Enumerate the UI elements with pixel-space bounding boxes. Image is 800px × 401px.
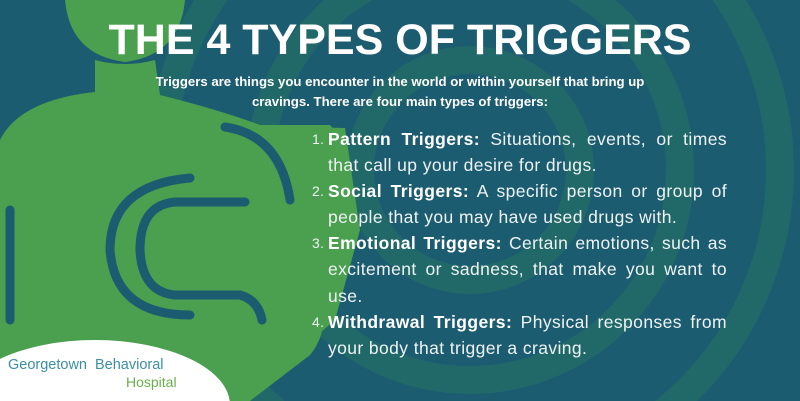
item 4: Withdrawal Triggers: Physical responses from your body that trigger a craving. [328,312,727,358]
subtitle: Triggers are things you encounter in the world or within yourself that bring up cravings. There are four main types of triggers: [156,74,644,109]
figure [0,0,360,401]
logo: Hospital [126,374,177,390]
item 4: 4. [312,314,324,330]
item 2: Social Triggers: A specific person or group of people that you may have used drugs with. [328,181,727,227]
item 2: 2. [312,183,324,199]
list of triggers [312,129,727,358]
logo [0,340,230,401]
item 1: Pattern Triggers: Situations, events, or times that call up your desire for drugs. [328,129,727,175]
title: THE 4 TYPES OF TRIGGERS [108,16,691,64]
item 1: 1. [312,131,324,147]
item 3: Emotional Triggers: Certain emotions, such as excitement or sadness, that make you want to use. [328,233,727,306]
logo: Georgetown Behavioral [8,357,164,373]
item 3: 3. [312,235,324,251]
